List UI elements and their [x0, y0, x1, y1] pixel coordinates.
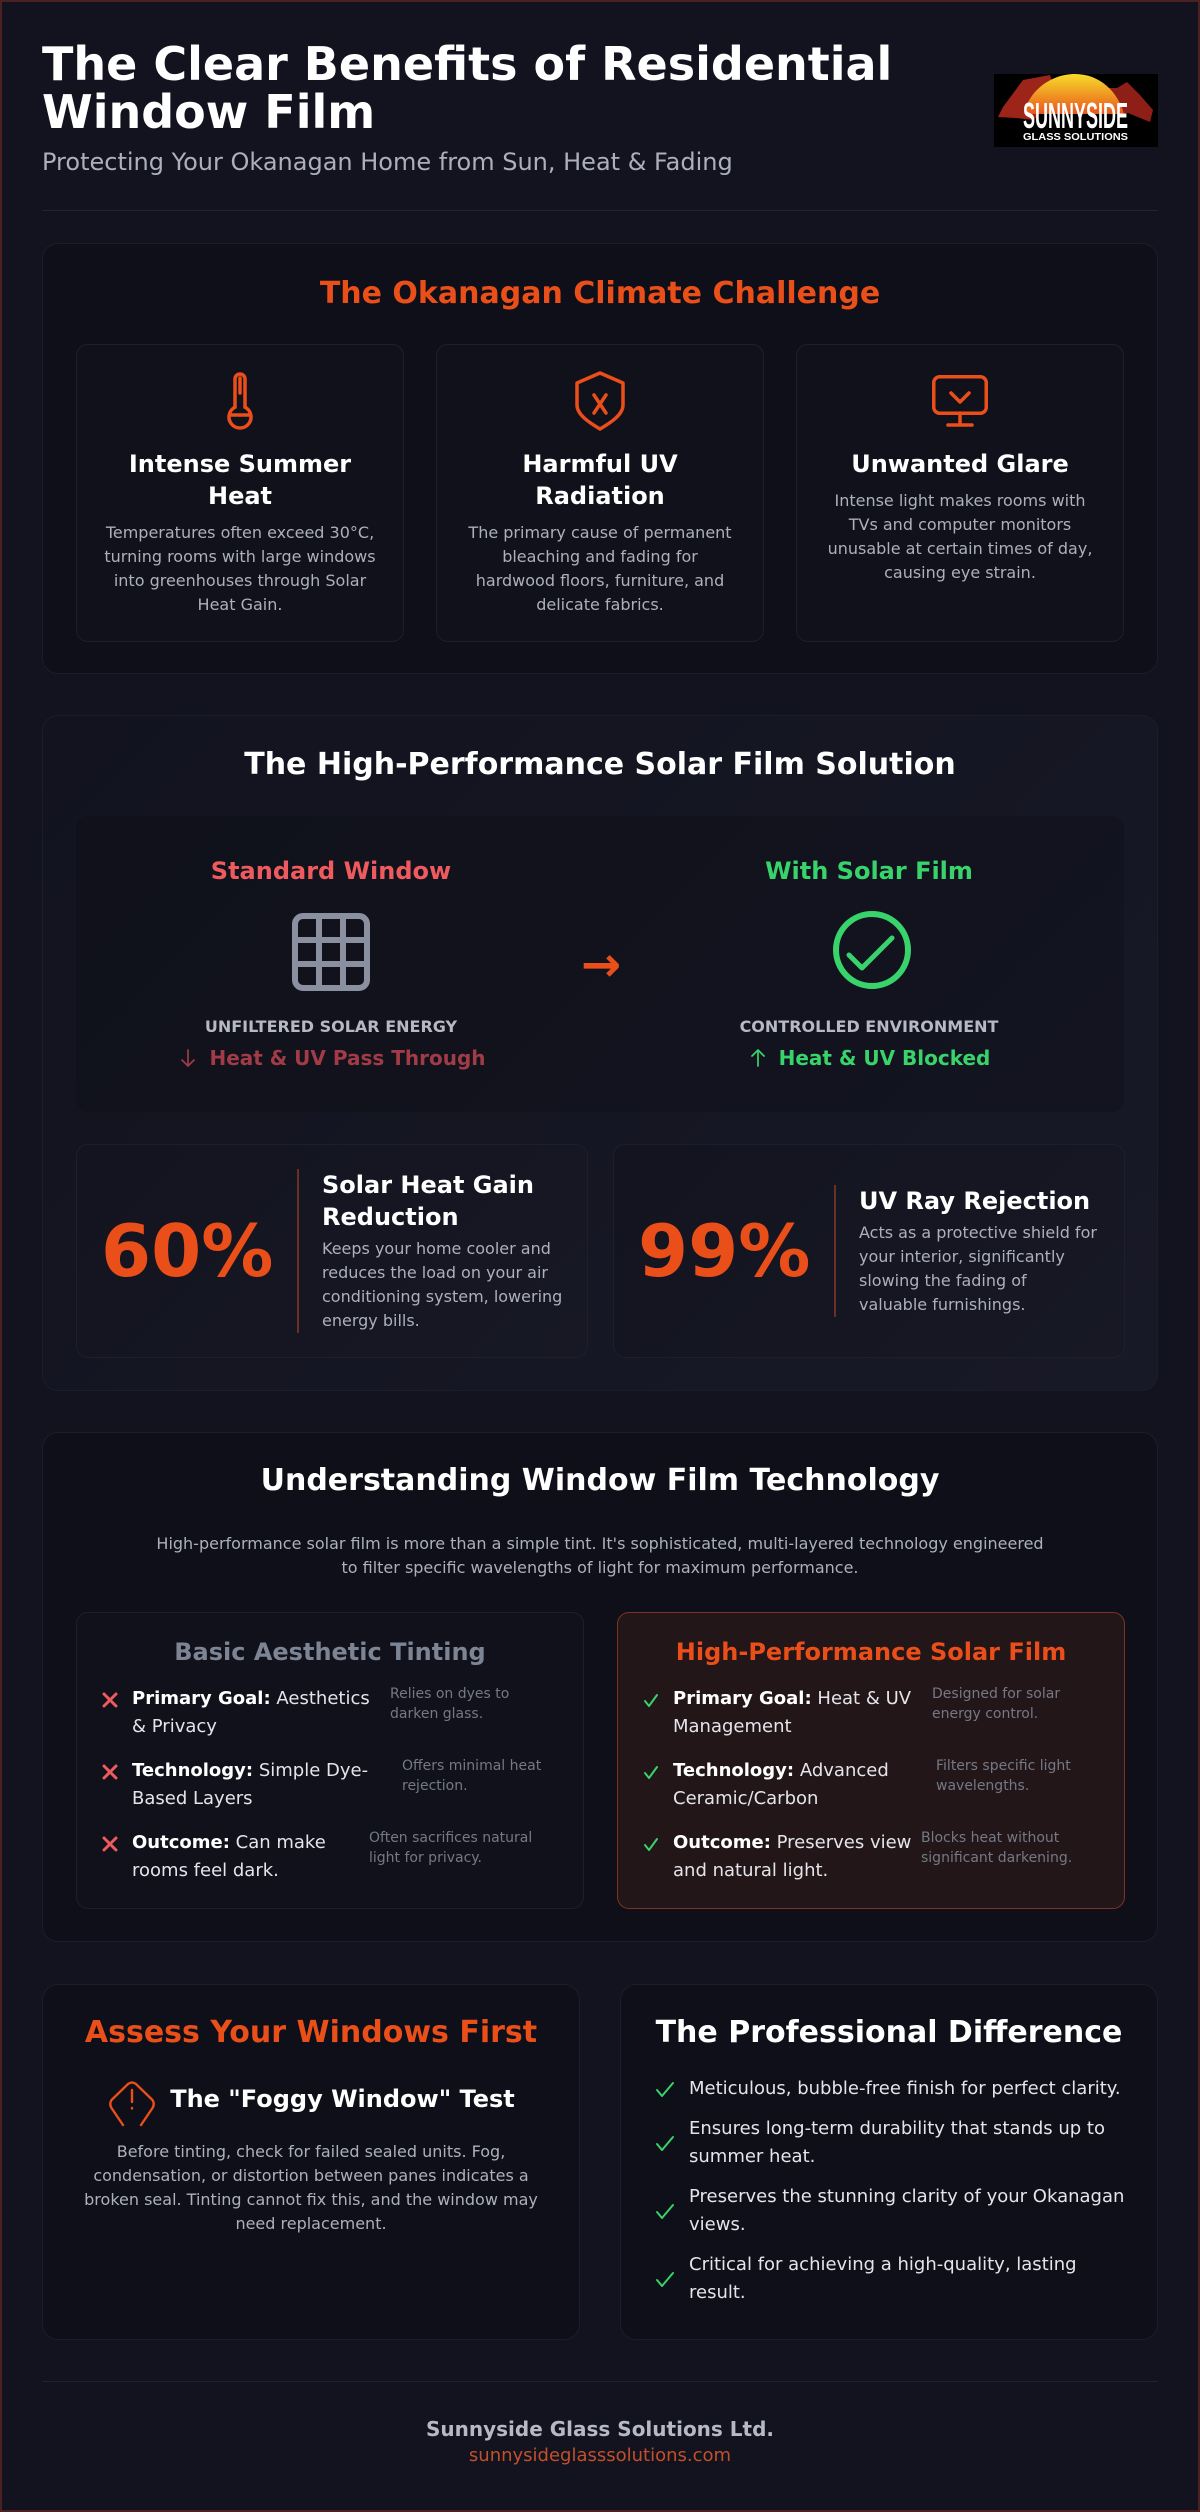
stat card: 99% — [613, 1144, 1125, 1358]
company name: Sunnyside Glass Solutions Ltd. — [426, 2417, 774, 2441]
card text: causing eye strain. — [884, 563, 1036, 582]
row note: significant darkening. — [921, 1850, 1072, 1866]
card text: Intense light makes rooms with — [834, 490, 1086, 510]
stat title: Solar Heat Gain — [322, 1171, 534, 1199]
card text: bleaching and fading for — [502, 547, 698, 566]
row: primary goal — [644, 1686, 1060, 1737]
row note — [936, 1758, 1071, 1794]
row: outcome — [102, 1830, 532, 1881]
row: primary goal — [102, 1686, 509, 1737]
arrow: → — [581, 937, 621, 993]
intro text: to filter specific wavelengths of light for maximum performance. — [341, 1558, 858, 1577]
row: technology — [102, 1758, 541, 1809]
card: UV radiation — [436, 344, 764, 642]
row text: Primary Goal: Heat & UV — [673, 1688, 911, 1709]
stat body: energy bills. — [322, 1311, 420, 1330]
heading: Assess Your Windows First — [85, 2015, 537, 2050]
card title: High-Performance Solar Film — [676, 1638, 1066, 1666]
card title: Basic Aesthetic Tinting — [174, 1638, 486, 1666]
foggy window text: broken seal. Tinting cannot fix this, and the window may — [84, 2190, 538, 2209]
stat body: valuable furnishings. — [859, 1295, 1026, 1314]
panel: professional difference — [620, 1984, 1158, 2340]
row text — [132, 1832, 326, 1881]
row: technology — [644, 1758, 1071, 1809]
row text: Primary Goal: Aesthetics — [132, 1688, 370, 1709]
stat body: reduces the load on your air — [322, 1263, 548, 1282]
website: sunnysideglasssolutions.com — [469, 2445, 731, 2466]
row note: energy control. — [932, 1706, 1038, 1722]
stat number: 60% — [101, 1209, 273, 1293]
foggy window test heading — [44, 2079, 579, 2127]
card: glare — [796, 344, 1124, 642]
row text: & Privacy — [132, 1716, 217, 1737]
row: outcome — [618, 1828, 1124, 1884]
item 3 — [621, 2183, 1157, 2239]
row note — [390, 1686, 509, 1722]
item text: Critical for achieving a high-quality, lasting — [689, 2254, 1077, 2275]
card text: into greenhouses through Solar — [114, 571, 366, 590]
item text — [689, 2251, 1077, 2307]
card text: turning rooms with large windows — [104, 547, 376, 566]
row text — [673, 1688, 911, 1737]
card text: Heat Gain. — [198, 595, 282, 614]
item text: Meticulous, bubble-free finish for perfect clarity. — [689, 2078, 1121, 2099]
stat body: Keeps your home cooler and — [322, 1239, 551, 1258]
card title: Radiation — [535, 482, 665, 510]
heading: The Okanagan Climate Challenge — [320, 276, 880, 311]
row text: Based Layers — [132, 1788, 253, 1809]
row note: light for privacy. — [369, 1850, 482, 1866]
stat body — [322, 1239, 562, 1330]
row text: Management — [673, 1716, 792, 1737]
foggy window text: condensation, or distortion between panes indicates a — [93, 2166, 529, 2185]
stat text — [834, 1185, 1097, 1317]
card title: Harmful UV — [522, 450, 678, 478]
card text — [104, 522, 376, 614]
card title: Heat — [208, 482, 272, 510]
card text: unusable at certain times of day, — [828, 539, 1092, 558]
icon: check — [644, 1766, 658, 1779]
card title: Unwanted Glare — [851, 450, 1069, 478]
column title: Standard Window — [211, 857, 451, 885]
stat title — [322, 1171, 534, 1231]
panel: assess windows — [42, 1984, 580, 2340]
icon: check — [653, 2267, 677, 2291]
item text: result. — [689, 2282, 746, 2303]
item text: views. — [689, 2214, 746, 2235]
item 1 — [621, 2075, 1157, 2103]
icon: check — [653, 2131, 677, 2155]
icon: check circle — [833, 911, 911, 989]
panel: climate challenge — [42, 243, 1158, 674]
card title: Intense Summer — [129, 450, 351, 478]
foggy window text: Before tinting, check for failed sealed units. Fog, — [117, 2142, 505, 2161]
title: Window Film — [42, 85, 375, 139]
row text: Outcome: Can make — [132, 1832, 326, 1853]
row note — [402, 1758, 541, 1794]
row note: Offers minimal heat — [402, 1758, 541, 1774]
icon: monitor — [932, 375, 988, 427]
panel: technology — [42, 1432, 1158, 1942]
row note — [369, 1830, 532, 1866]
card text — [828, 490, 1092, 582]
row text: Ceramic/Carbon — [673, 1788, 818, 1809]
row note — [921, 1828, 1072, 1868]
row text — [673, 1760, 889, 1809]
footer — [42, 2381, 1158, 2481]
heat blocked: Heat & UV Blocked — [779, 1046, 990, 1070]
item text — [689, 2183, 1124, 2239]
row text: Outcome: Preserves view — [673, 1832, 911, 1853]
icon: window grid — [292, 913, 370, 991]
icon: check — [644, 1694, 658, 1707]
stat text — [297, 1169, 562, 1333]
icon: check — [653, 2199, 677, 2223]
icon: thermometer — [227, 372, 253, 430]
card: high performance film — [617, 1612, 1125, 1909]
icon: x — [102, 1692, 118, 1708]
row note: Blocks heat without — [921, 1830, 1059, 1846]
row note: Filters specific light — [936, 1758, 1071, 1774]
row note: Designed for solar — [932, 1686, 1060, 1702]
stat body — [859, 1223, 1097, 1314]
intro text — [156, 1534, 1044, 1577]
card text — [468, 522, 732, 614]
icon: warning — [108, 2079, 156, 2127]
row text: and natural light. — [673, 1860, 828, 1881]
foggy window text — [43, 2140, 579, 2236]
item text: summer heat. — [689, 2146, 815, 2167]
label: UNFILTERED SOLAR ENERGY — [205, 1017, 457, 1036]
card text: Temperatures often exceed 30°C, — [106, 522, 374, 542]
header — [42, 40, 1158, 211]
item text: Preserves the stunning clarity of your Okanagan — [689, 2186, 1124, 2207]
stat body: conditioning system, lowering — [322, 1287, 562, 1306]
icon: x — [102, 1764, 118, 1780]
item text: Ensures long-term durability that stands up to — [689, 2118, 1105, 2139]
icon: shield — [575, 371, 625, 431]
icon: check — [642, 1835, 660, 1853]
stat title: Reduction — [322, 1203, 459, 1231]
title: The Clear Benefits of Residential — [42, 37, 892, 91]
subtitle: Protecting Your Okanagan Home from Sun, Heat & Fading — [42, 148, 733, 176]
icon: check — [653, 2077, 677, 2101]
subheading: The "Foggy Window" Test — [170, 2085, 515, 2113]
row note — [932, 1686, 1060, 1722]
stat body: slowing the fading of — [859, 1271, 1027, 1290]
card text: delicate fabrics. — [536, 595, 664, 614]
row text: Technology: Simple Dye- — [132, 1760, 368, 1781]
column title: With Solar Film — [765, 857, 973, 885]
card: summer heat — [76, 344, 404, 642]
label: CONTROLLED ENVIRONMENT — [740, 1017, 998, 1036]
row text: rooms feel dark. — [132, 1860, 279, 1881]
row note: rejection. — [402, 1778, 468, 1794]
row note: wavelengths. — [936, 1778, 1029, 1794]
stat body: your interior, significantly — [859, 1247, 1065, 1266]
row text — [132, 1688, 370, 1737]
item text — [689, 2115, 1105, 2171]
logo: GLASS SOLUTIONS — [1023, 132, 1128, 143]
row text: Technology: Advanced — [673, 1760, 889, 1781]
logo — [994, 74, 1158, 147]
stat body: Acts as a protective shield for — [859, 1223, 1097, 1242]
stat card: 60% — [76, 1144, 588, 1358]
card text: hardwood floors, furniture, and — [476, 571, 724, 590]
item 2 — [621, 2115, 1157, 2171]
card title — [129, 450, 352, 510]
card: basic tinting — [76, 1612, 584, 1909]
comparison panel — [76, 816, 1124, 1112]
stat number: 99% — [638, 1209, 810, 1293]
row note: darken glass. — [390, 1706, 483, 1722]
card text: TVs and computer monitors — [849, 515, 1071, 534]
row text — [132, 1760, 368, 1809]
card title — [522, 450, 678, 510]
row text — [673, 1829, 911, 1885]
row note: Relies on dyes to — [390, 1686, 509, 1702]
heading: The Professional Difference — [656, 2015, 1122, 2050]
icon: x — [102, 1836, 118, 1852]
pass through: Heat & UV Pass Through — [209, 1046, 486, 1070]
foggy window text: need replacement. — [235, 2214, 387, 2233]
item 4 — [621, 2251, 1157, 2307]
intro text: High-performance solar film is more than a simple tint. It's sophisticated, multi-layered technology engineered — [156, 1534, 1044, 1553]
card text: The primary cause of permanent — [468, 522, 732, 542]
heading: The High-Performance Solar Film Solution — [244, 747, 956, 782]
panel: solar film solution — [42, 715, 1158, 1391]
stat title: UV Ray Rejection — [859, 1187, 1090, 1215]
title — [42, 37, 892, 139]
row note: Often sacrifices natural — [369, 1830, 532, 1846]
heading: Understanding Window Film Technology — [261, 1463, 939, 1498]
